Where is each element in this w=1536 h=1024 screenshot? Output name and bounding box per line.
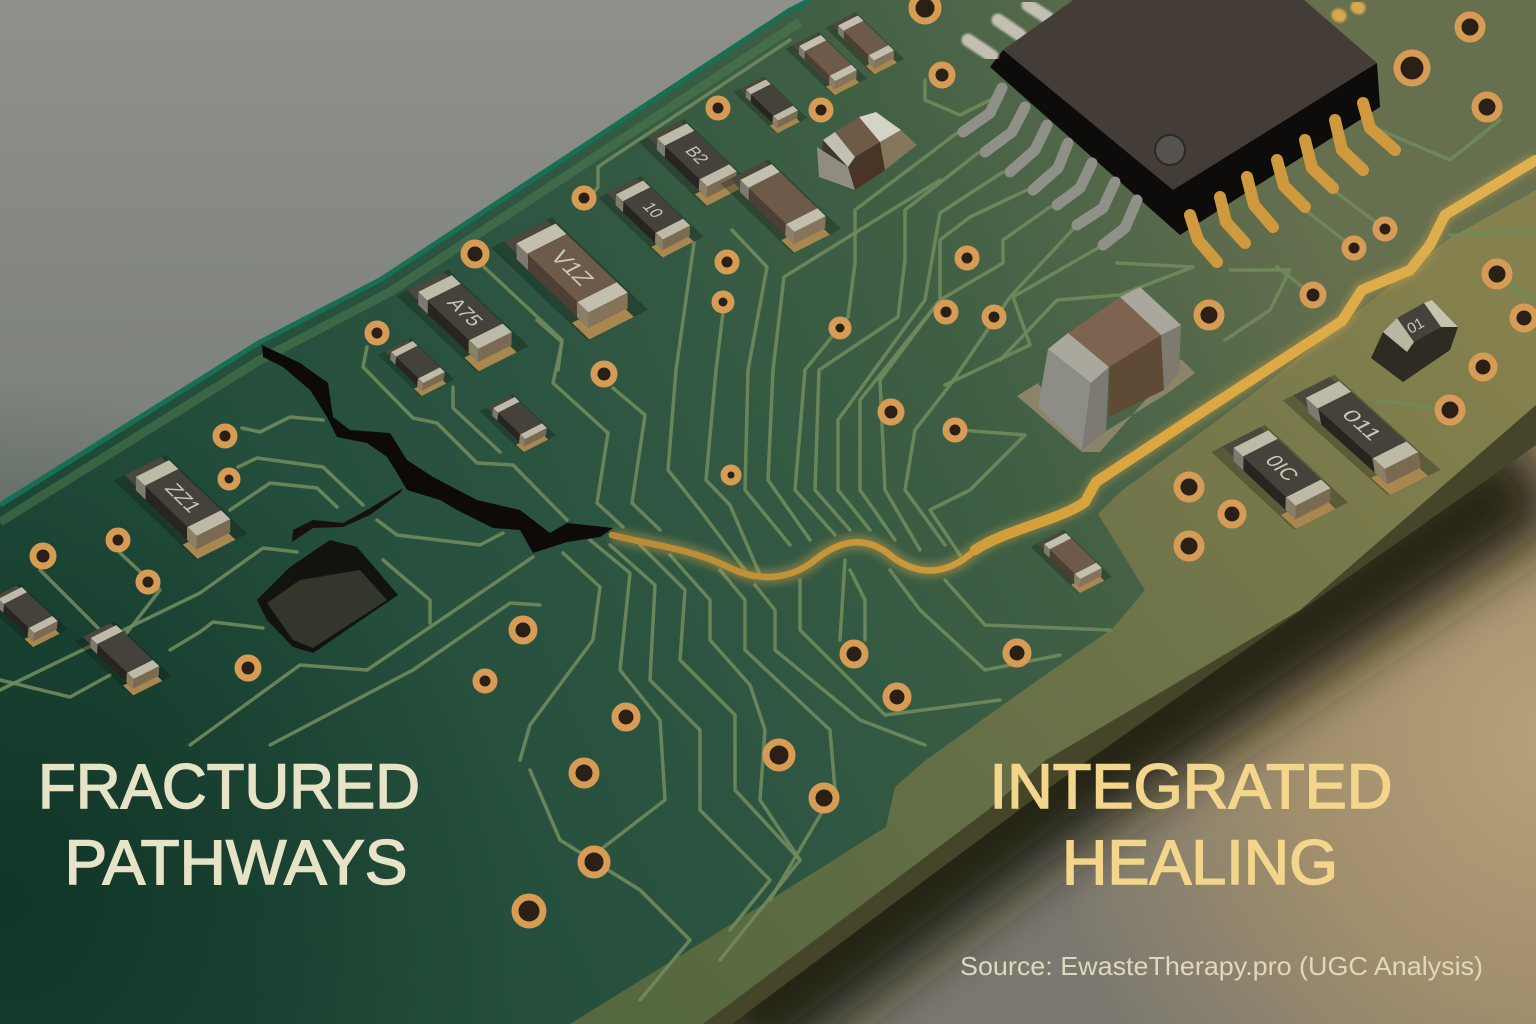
component 3	[75, 621, 172, 696]
heading: fractured pathways	[38, 752, 420, 898]
component 2	[0, 584, 68, 648]
component 13	[786, 32, 867, 96]
component 16: 0IC	[1260, 452, 1304, 484]
board side edge	[690, 395, 1536, 1024]
component 9	[639, 119, 751, 206]
component 6	[480, 394, 556, 453]
component 11	[817, 112, 917, 190]
large capacitor	[1017, 287, 1195, 452]
heading: fractured pathways: FRACTURED	[38, 752, 420, 822]
component 7: V1Z	[544, 247, 599, 289]
chip pins, lower right edge	[1190, 103, 1395, 262]
component 17: 011	[1337, 406, 1388, 444]
component 1	[114, 455, 248, 560]
component 10	[720, 159, 841, 253]
heading: fractured pathways: PATHWAYS	[64, 828, 408, 898]
chip body side	[990, 50, 1380, 235]
component 14	[825, 12, 904, 75]
component 5	[378, 338, 454, 397]
chip pins, upper edges	[968, 5, 1359, 56]
chip pins, lower left edge	[963, 88, 1137, 245]
component 4: A75	[442, 295, 487, 329]
crack in the board	[262, 345, 613, 553]
heading: integrated healing: INTEGRATED	[990, 752, 1392, 822]
integrated gold trace	[612, 160, 1536, 577]
component 18: 01	[1404, 315, 1427, 338]
microchip	[963, 0, 1395, 262]
source credit: Source: EwasteTherapy.pro (UGC Analysis)	[960, 951, 1483, 981]
surface-mount components	[0, 12, 1458, 696]
broken hole in the board	[257, 540, 398, 653]
board top rim	[0, 0, 810, 505]
component 1: ZZ1	[159, 481, 205, 516]
component 9: B2	[681, 143, 714, 167]
component 18	[1371, 300, 1458, 382]
component 16	[1211, 425, 1348, 530]
component 17	[1283, 375, 1440, 496]
component 7	[491, 217, 648, 340]
component 12	[734, 76, 807, 134]
component 8: 10	[638, 200, 667, 220]
component 15	[1031, 530, 1112, 594]
component 8	[598, 176, 704, 258]
chip top surface	[1003, 0, 1377, 190]
component 4	[397, 270, 529, 372]
chip pin-one marker	[1155, 135, 1185, 165]
heading: integrated healing: HEALING	[1062, 828, 1338, 898]
heading: integrated healing	[990, 752, 1392, 898]
